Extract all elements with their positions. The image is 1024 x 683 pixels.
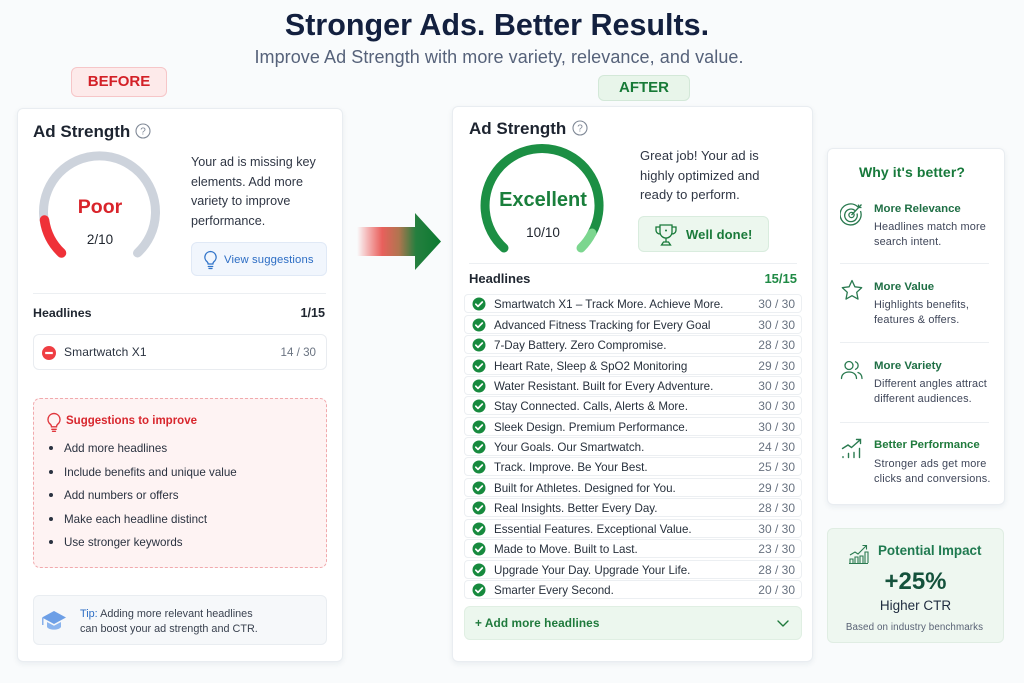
panel heading: Why it's better? [859,164,965,180]
after description: highly optimized and [640,168,760,183]
headline list: Essential Features. Exceptional Value. [494,523,692,536]
suggestions list: Use stronger keywords [64,536,183,549]
item text [874,220,986,248]
gauge: excellent [480,144,604,252]
headline list: Sleek Design. Premium Performance. [494,421,688,434]
before headlines label: Headlines [33,306,92,320]
item: better performance [842,438,991,485]
gauge score: 2/10 [87,232,113,247]
icon: help [572,120,588,136]
item title: More Variety [874,360,942,372]
subtitle: Improve Ad Strength with more variety, relevance, and value. [254,47,744,67]
icon: graduation cap [42,611,66,630]
after description [640,148,760,202]
headline list: Made to Move. Built to Last. [494,543,638,556]
headline list: 29 / 30 [758,359,795,373]
headline list: 20 / 30 [758,583,795,597]
after badge [598,75,690,101]
item text: Highlights benefits, [874,298,969,310]
icon: bar growth [849,545,869,564]
button label: View suggestions [224,254,314,266]
stat: +25% [884,568,947,595]
headline list: 29 / 30 [758,481,795,495]
item text [874,378,987,405]
headline list: Advanced Fitness Tracking for Every Goal [494,319,711,332]
icon: help [136,124,150,138]
headline list: 30 / 30 [758,399,795,413]
suggestions list: Include benefits and unique value [64,466,237,478]
suggestions heading: Suggestions to improve [66,414,197,426]
view suggestions button [191,242,327,276]
headline list: Heart Rate, Sleep & SpO2 Monitoring [494,360,687,373]
tip box [33,595,327,645]
item: more relevance [840,203,986,248]
suggestions list: Add more headlines [64,442,167,455]
headline list: Stay Connected. Calls, Alerts & More. [494,400,688,413]
after description: Great job! Your ad is [640,148,759,163]
headline list: Upgrade Your Day. Upgrade Your Life. [494,564,690,577]
before headlines count: 1/15 [300,306,325,320]
item title: More Value [874,280,934,292]
headline list: 30 / 30 [758,420,795,434]
before description: elements. Add more [191,175,303,189]
item title: More Relevance [874,203,961,215]
icon: chart [842,438,862,458]
icon: trophy [655,224,677,246]
tip text: Tip: Adding more relevant headlines [80,608,253,620]
before description: performance. [191,214,265,228]
icon: target [840,203,862,226]
before badge [71,67,167,97]
suggestions list [49,442,237,549]
icon: bulb [47,412,61,432]
panel: before ad strength [17,108,343,662]
before description [191,155,316,228]
before description: variety to improve [191,194,290,208]
tip text [80,608,258,634]
item text: Different angles attract [874,378,987,390]
before description: Your ad is missing key [191,155,316,169]
before heading: Ad Strength [33,122,130,141]
tip text: can boost your ad strength and CTR. [80,622,258,634]
item text [874,458,991,485]
before headline row [33,334,327,370]
after headlines label: Headlines [469,271,530,286]
headline list: Your Goals. Our Smartwatch. [494,441,644,454]
suggestions list: Make each headline distinct [64,512,207,526]
gauge label poor: Poor [78,196,122,218]
headline list: 7-Day Battery. Zero Compromise. [494,339,666,352]
panel: after ad strength [452,106,813,662]
item: more value [842,280,969,326]
headline list: 30 / 30 [758,522,795,536]
headline list: 23 / 30 [758,542,795,556]
headline list: Smartwatch X1 – Track More. Achieve More. [494,298,723,311]
item text [874,298,969,326]
well done badge [638,216,769,252]
icon: minus [42,346,56,360]
panel: potential impact [827,528,1004,643]
after heading: Ad Strength [469,119,566,138]
headline list: Smarter Every Second. [494,584,614,597]
headline count: 14 / 30 [281,346,316,359]
headline list: 30 / 30 [758,318,795,332]
headline list: 28 / 30 [758,501,795,515]
headline list: Water Resistant. Built for Every Adventure. [494,380,713,393]
headline list: 30 / 30 [758,297,795,311]
after badge: AFTER [619,79,669,96]
icon: people [840,360,863,380]
footnote: Based on industry benchmarks [846,622,983,633]
gauge: poor [39,151,160,258]
item text: Stronger ads get more [874,458,987,470]
headline list: Built for Athletes. Designed for You. [494,482,676,495]
headline list: 24 / 30 [758,440,795,454]
panel: why it's better [827,148,1005,505]
icon: help: ? [577,124,583,134]
after description: ready to perform. [640,187,740,202]
icon: chevron [777,620,789,627]
suggestions list: Add numbers or offers [64,489,178,502]
add more label: + Add more headlines [475,616,599,630]
icon: help: ? [140,126,146,138]
icon: bulb [204,250,217,270]
item text: Headlines match more [874,220,986,232]
item text: search intent. [874,236,941,248]
headline list: 25 / 30 [758,460,795,474]
icon: star [842,280,862,300]
suggestions panel [33,398,327,568]
arrow [358,213,441,270]
item text: features & offers. [874,314,959,326]
badge label: Well done! [686,227,752,242]
title: Stronger Ads. Better Results. [285,8,709,42]
before badge: BEFORE [88,73,150,90]
headline list: Track. Improve. Be Your Best. [494,461,648,474]
headline list: Real Insights. Better Every Day. [494,502,657,515]
heading: Potential Impact [878,543,981,558]
headline list: 28 / 30 [758,338,795,352]
item: more variety [840,360,987,405]
headline list: 28 / 30 [758,563,795,577]
gauge label excellent: Excellent [499,189,587,211]
gauge score: 10/10 [526,225,560,240]
stat label: Higher CTR [880,598,951,613]
item title: Better Performance [874,439,980,451]
item text: different audiences. [874,393,972,405]
headline text: Smartwatch X1 [64,345,147,359]
add more headlines bar [464,606,802,640]
after headlines count: 15/15 [764,271,797,286]
item text: clicks and conversions. [874,473,991,485]
headline list: 30 / 30 [758,379,795,393]
